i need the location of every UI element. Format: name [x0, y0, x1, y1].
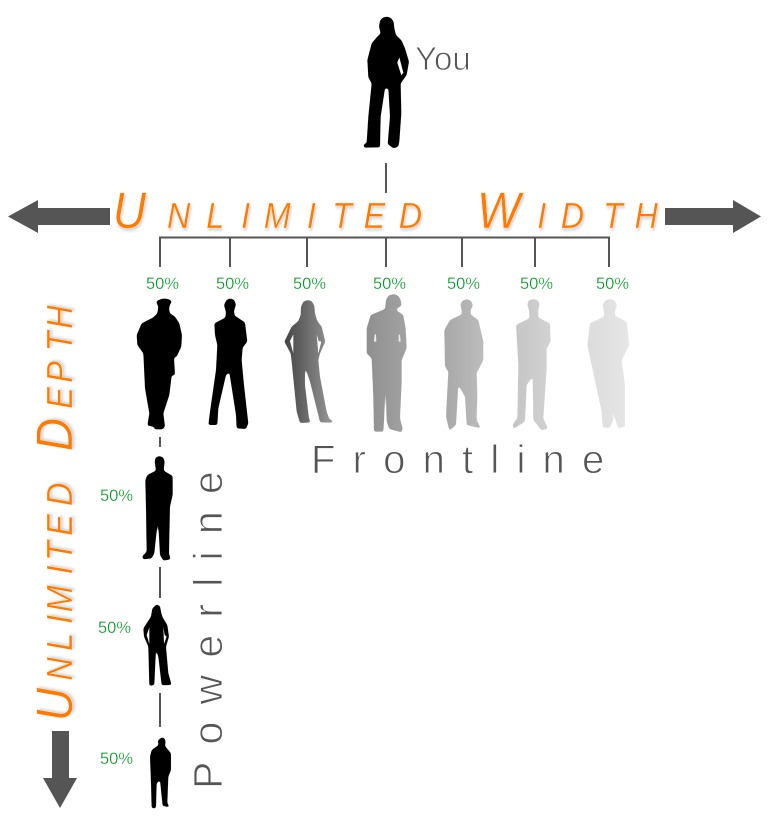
heading: Unlimited Width: D [399, 196, 422, 236]
heading: Unlimited Depth: D [27, 418, 84, 451]
heading: Unlimited Depth: I [40, 614, 80, 624]
heading: Unlimited Depth: P [40, 361, 80, 383]
heading: Unlimited Width [113, 183, 658, 240]
heading: Unlimited Depth: T [40, 329, 80, 351]
heading: Unlimited Width: I [241, 196, 251, 236]
heading: Unlimited Width: I [537, 196, 547, 236]
frontline silhouettes 1 to 3 [137, 298, 333, 429]
heading: Unlimited Width: H [635, 196, 658, 236]
arrow: down [43, 731, 77, 808]
heading: Unlimited Depth: E [40, 513, 80, 536]
frontline percentages: 50% [216, 275, 249, 293]
heading: Unlimited Width: I [307, 196, 316, 236]
heading: Unlimited Width: W [477, 183, 524, 240]
powerline silhouettes [142, 456, 173, 808]
arrow: left [8, 200, 110, 233]
frontline silhouettes 4 to 7 [367, 294, 629, 432]
frontline connector bracket [160, 237, 609, 267]
frontline percentages: 50% [373, 275, 406, 293]
heading: Unlimited Width: U [113, 183, 147, 240]
heading: Unlimited Depth: E [40, 386, 80, 409]
heading: Unlimited Depth: D [40, 483, 80, 506]
label: Frontline: Frontline [311, 438, 621, 482]
powerline percentages: 50% [100, 487, 133, 505]
frontline percentages: 50% [146, 275, 179, 293]
heading: Unlimited Depth: M [40, 585, 80, 612]
powerline connectors [159, 437, 161, 727]
heading: Unlimited Width: T [603, 196, 625, 236]
powerline percentages: 50% [100, 750, 133, 768]
heading: Unlimited Width: D [561, 196, 584, 236]
heading: Unlimited Width: T [332, 196, 354, 236]
heading: Unlimited Depth: H [40, 305, 80, 329]
heading: Unlimited Depth: N [40, 657, 80, 681]
heading: Unlimited Width: N [167, 196, 191, 236]
heading: Unlimited Depth: T [40, 539, 80, 561]
heading: Unlimited Depth [27, 305, 84, 721]
heading: Unlimited Width: E [364, 196, 386, 236]
heading: Unlimited Depth: U [27, 687, 84, 721]
frontline percentages: 50% [447, 275, 480, 293]
arrow: right [665, 200, 761, 233]
heading: Unlimited Depth: I [40, 565, 80, 574]
connector: you to width bar [385, 163, 387, 193]
powerline percentages [98, 487, 133, 768]
heading: Unlimited Depth: L [40, 633, 80, 651]
icon: You silhouette [363, 17, 409, 148]
frontline percentages: 50% [293, 275, 326, 293]
heading: Unlimited Width: M [264, 196, 291, 236]
frontline percentages: 50% [520, 275, 553, 293]
frontline percentages: 50% [596, 275, 629, 293]
frontline percentages [146, 275, 629, 293]
label: Powerline: Powerline [185, 454, 231, 789]
powerline percentages: 50% [98, 619, 131, 637]
heading: Unlimited Width: L [206, 196, 224, 236]
label: You: You [415, 40, 471, 77]
